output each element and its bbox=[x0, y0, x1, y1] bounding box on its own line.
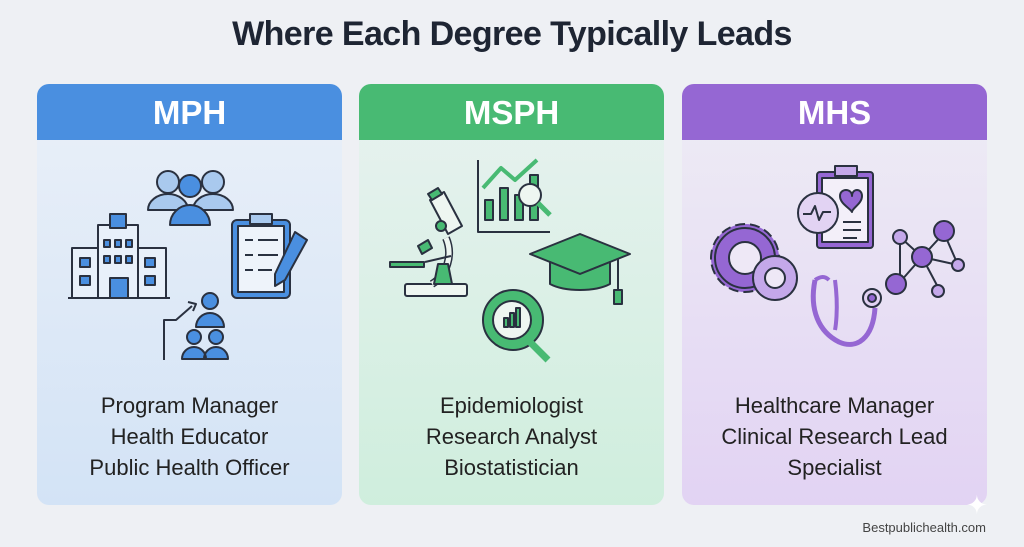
panel: MSPH bbox=[359, 84, 664, 505]
icon: gears bbox=[711, 224, 797, 300]
icon: microscope bbox=[390, 188, 467, 296]
job list: MSPH: Research Analyst bbox=[426, 424, 597, 449]
icon: network bbox=[886, 221, 964, 297]
panel: MHS bbox=[682, 84, 987, 505]
icon: rising bar chart bbox=[478, 160, 550, 232]
job list: MPH bbox=[89, 393, 290, 480]
header: MHS bbox=[682, 84, 987, 140]
header: MSPH bbox=[359, 84, 664, 140]
icon: magnifier chart bbox=[483, 290, 548, 360]
footer credit: Bestpublichealth.com bbox=[862, 520, 986, 535]
sparkle decoration: ✦ bbox=[966, 490, 988, 520]
icon: clipboard checklist bbox=[232, 214, 307, 298]
icon: hospital bbox=[68, 214, 170, 298]
header: MSPH: MSPH bbox=[464, 94, 559, 131]
job list: MHS: Healthcare Manager bbox=[735, 393, 934, 418]
header: MPH bbox=[37, 84, 342, 140]
job list: MPH: Program Manager bbox=[101, 393, 278, 418]
header: MPH: MPH bbox=[153, 94, 226, 131]
icon: people with arrow bbox=[164, 293, 228, 360]
job list: MHS: Clinical Research Lead bbox=[721, 424, 948, 449]
title: Where Each Degree Typically Leads bbox=[232, 15, 792, 53]
job list: MPH: Health Educator bbox=[111, 424, 268, 449]
job list: MHS bbox=[721, 393, 948, 480]
panel: MPH bbox=[37, 84, 342, 505]
job list: MSPH: Epidemiologist bbox=[440, 393, 583, 418]
job list: MSPH: Biostatistician bbox=[444, 455, 579, 480]
job list: MHS: Specialist bbox=[787, 455, 882, 480]
icon: graduation cap bbox=[530, 234, 630, 304]
job list: MSPH bbox=[426, 393, 597, 480]
icon: medical clipboard bbox=[798, 166, 873, 248]
icon: stethoscope bbox=[813, 277, 881, 344]
icon: people group bbox=[148, 171, 233, 225]
header: MHS: MHS bbox=[798, 94, 871, 131]
job list: MPH: Public Health Officer bbox=[89, 455, 290, 480]
